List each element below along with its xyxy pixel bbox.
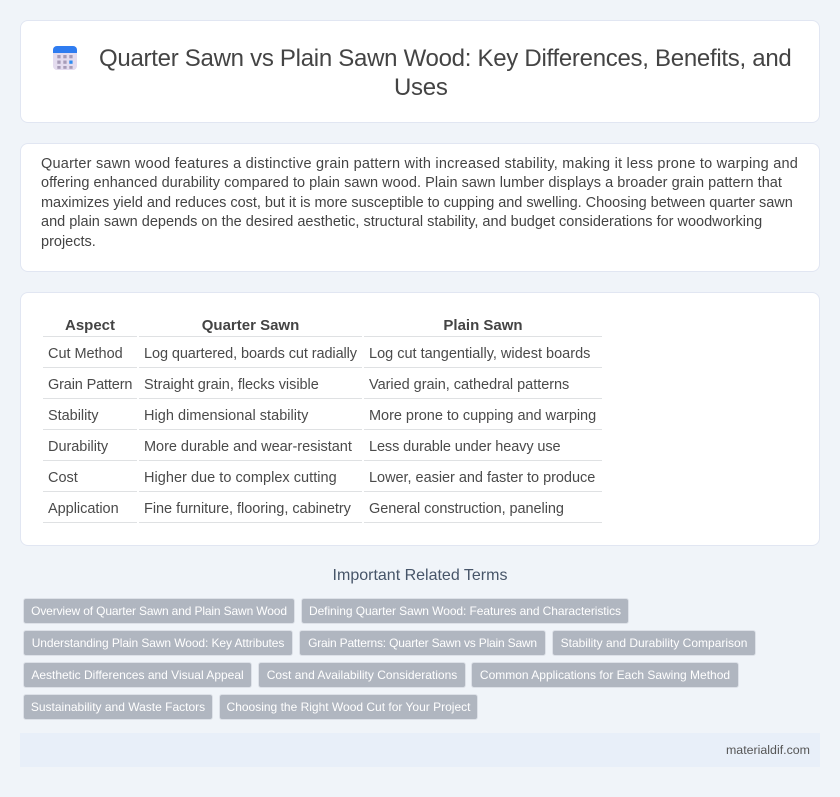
tag	[301, 598, 629, 624]
quarter sawn stability: High dimensional stability	[144, 408, 308, 424]
quarter sawn cut method: Log quartered, boards cut radially	[144, 346, 357, 362]
description text: and plain sawn depends on the desired aesthetic, structural stability, and budget considerations for woodworking	[41, 214, 762, 230]
tag	[23, 598, 295, 624]
footer	[20, 733, 820, 767]
tag: Understanding Plain Sawn Wood: Key Attributes	[32, 636, 284, 650]
tag: Choosing the Right Wood Cut for Your Project	[227, 700, 470, 714]
tag: Common Applications for Each Sawing Method	[480, 668, 730, 682]
tag	[219, 694, 478, 720]
tag: Defining Quarter Sawn Wood: Features and Characteristics	[309, 604, 621, 618]
quarter sawn durability: More durable and wear-resistant	[144, 439, 352, 455]
row: Cost: Cost	[48, 470, 78, 486]
table header: Plain Sawn: Plain Sawn	[443, 317, 523, 334]
table header: Aspect: Aspect	[65, 317, 115, 334]
tag: Stability and Durability Comparison	[561, 636, 747, 650]
description text	[41, 156, 798, 250]
plain sawn grain: Varied grain, cathedral patterns	[369, 377, 569, 393]
tag: Sustainability and Waste Factors	[31, 700, 205, 714]
icon: calendar	[53, 46, 77, 70]
tag	[23, 630, 293, 656]
tag	[552, 630, 756, 656]
plain sawn cost: Lower, easier and faster to produce	[369, 470, 595, 486]
row: Stability: Stability	[48, 408, 99, 424]
quarter sawn cost: Higher due to complex cutting	[144, 470, 337, 486]
row: Cut Method: Cut Method	[48, 346, 123, 362]
tag: Aesthetic Differences and Visual Appeal	[31, 668, 244, 682]
tag: Overview of Quarter Sawn and Plain Sawn Wood	[31, 604, 287, 618]
table header: Quarter Sawn: Quarter Sawn	[202, 317, 299, 334]
plain sawn stability: More prone to cupping and warping	[369, 408, 596, 424]
description text: projects.	[41, 234, 96, 250]
plain sawn cut method: Log cut tangentially, widest boards	[369, 346, 590, 362]
quarter sawn application: Fine furniture, flooring, cabinetry	[144, 501, 351, 517]
footer source: materialdif.com	[726, 743, 810, 757]
tag	[23, 694, 213, 720]
tag	[258, 662, 466, 688]
plain sawn durability: Less durable under heavy use	[369, 439, 560, 455]
row: Durability: Durability	[48, 439, 108, 455]
title line 1: Quarter Sawn vs Plain Sawn Wood: Key Differences, Benefits, and	[99, 45, 792, 72]
panel: comparison table	[20, 292, 820, 546]
tag	[299, 630, 546, 656]
tag: Grain Patterns: Quarter Sawn vs Plain Sawn	[308, 636, 537, 650]
panel: description	[20, 143, 820, 272]
description text: maximizes yield and reduces cost, but it is more susceptible to cupping and swelling. Choosing between quarter sawn	[41, 194, 793, 210]
tag	[471, 662, 739, 688]
description text: Quarter sawn wood features a distinctive grain pattern with increased stability, making it less prone to warping and	[41, 156, 798, 172]
panel: header	[20, 20, 820, 123]
description text: offering enhanced durability compared to plain sawn wood. Plain sawn lumber displays a broader grain pattern that	[41, 175, 782, 191]
quarter sawn grain: Straight grain, flecks visible	[144, 377, 319, 393]
title line 2: Uses	[394, 74, 448, 101]
tag	[23, 662, 252, 688]
plain sawn application: General construction, paneling	[369, 501, 564, 517]
row: Grain Pattern: Grain Pattern	[48, 377, 132, 393]
row: Application: Application	[48, 501, 119, 517]
tag: Cost and Availability Considerations	[267, 668, 457, 682]
heading: related terms: Important Related Terms	[333, 567, 507, 584]
